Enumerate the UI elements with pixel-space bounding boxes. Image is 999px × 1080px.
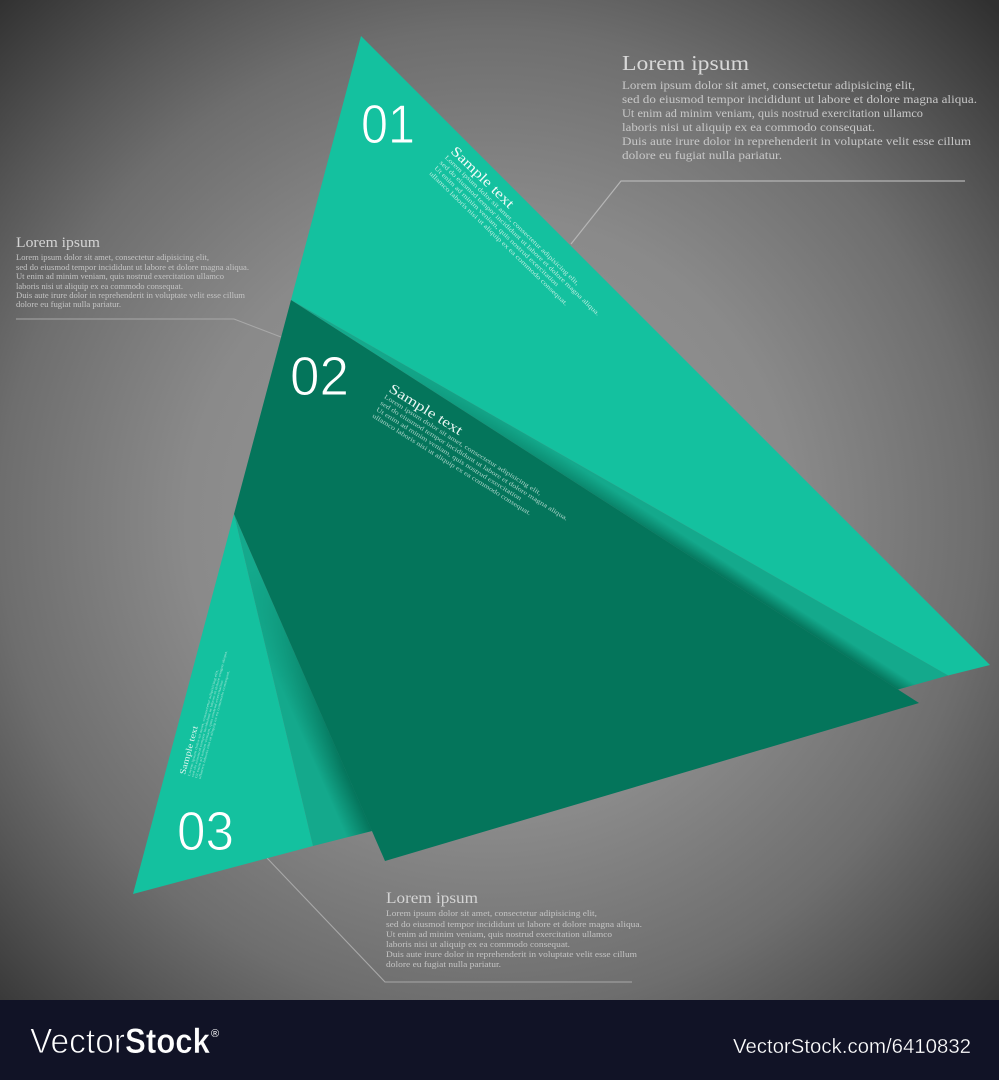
text block: section 02: [16, 235, 249, 309]
fold 03: [234, 514, 372, 846]
sample body 01: Lorem ipsum dolor sit amet, consectetur adipisicing elit,: [443, 154, 581, 287]
body 01: Duis aute irure dolor in reprehenderit in voluptate velit esse cillum: [622, 134, 972, 148]
panel: triangle 02: [234, 300, 919, 861]
footer logo: Stock: [125, 1022, 210, 1061]
footer logo: [30, 1022, 219, 1061]
sample heading 02: Sample text: [386, 382, 465, 439]
body 01: sed do eiusmod tempor incididunt ut labore et dolore magna aliqua.: [622, 92, 977, 106]
sample body 02: sed do eiusmod tempor incididunt ut labore et dolore magna aliqua.: [379, 400, 569, 523]
footer bar: [0, 1000, 999, 1080]
heading 03: Lorem ipsum: [386, 890, 478, 907]
body 02: sed do eiusmod tempor incididunt ut labore et dolore magna aliqua.: [16, 263, 249, 272]
leader line: section 02: [16, 319, 281, 337]
body 03: Ut enim ad minim veniam, quis nostrud exercitation ullamco: [386, 929, 613, 939]
body 03: Duis aute irure dolor in reprehenderit in voluptate velit esse cillum: [386, 949, 637, 959]
body 02: Ut enim ad minim veniam, quis nostrud exercitation ullamco: [16, 272, 224, 281]
panel: triangle 01: [291, 36, 990, 690]
text block: section 01: [622, 51, 977, 162]
sample body 02: ullamco laboris nisi ut aliquip ex ea commodo consequat.: [371, 413, 533, 517]
sample body 03: Ut enim ad minim veniam, quis nostrud exercitation: [194, 679, 225, 779]
sample body 02: Lorem ipsum dolor sit amet, consectetur adipisicing elit,: [383, 394, 543, 497]
sample body 03: ullamco laboris nisi ut aliquip ex ea commodo consequat.: [198, 670, 231, 779]
light face 01: [291, 36, 990, 676]
sample body 03: Lorem ipsum dolor sit amet, consectetur adipisicing elit,: [187, 669, 220, 777]
sample heading 03: Sample text: [177, 724, 200, 776]
body 03: laboris nisi ut aliquip ex ea commodo consequat.: [386, 939, 570, 949]
body 03: dolore eu fugiat nulla pariatur.: [386, 959, 501, 969]
fold shadow 03: [268, 600, 372, 836]
body 03: [386, 908, 642, 969]
footer logo: Vector: [30, 1022, 125, 1061]
sample body 02: [371, 394, 573, 535]
body 02: [16, 253, 249, 309]
body 02: Duis aute irure dolor in reprehenderit in voluptate velit esse cillum: [16, 291, 246, 300]
number 02: 02: [290, 345, 349, 407]
sample text 02: [371, 382, 581, 535]
sample body 03: sed do eiusmod tempor incididunt ut labore et dolore magna aliqua.: [191, 650, 228, 778]
number 03: 03: [177, 800, 234, 862]
body 02: dolore eu fugiat nulla pariatur.: [16, 300, 121, 309]
body 02: Lorem ipsum dolor sit amet, consectetur adipisicing elit,: [16, 253, 209, 262]
sample body 01: Ut enim ad minim veniam, quis nostrud exercitation: [433, 165, 561, 289]
sample body 01: sed do eiusmod tempor incididunt ut labore et dolore magna aliqua.: [438, 160, 601, 318]
footer logo: ®: [211, 1028, 219, 1040]
sample text 03: [177, 646, 235, 779]
heading 01: Lorem ipsum: [622, 51, 749, 75]
body 01: laboris nisi ut aliquip ex ea commodo consequat.: [622, 120, 875, 134]
light face 03: [133, 514, 313, 894]
heading 02: Lorem ipsum: [16, 235, 101, 251]
sample body 02: Ut enim ad minim veniam, quis nostrud exercitation: [375, 406, 523, 503]
body 01: Ut enim ad minim veniam, quis nostrud exercitation ullamco: [622, 106, 923, 120]
number 01: 01: [361, 93, 415, 155]
sample text 01: [427, 144, 616, 329]
leader line: section 03: [267, 858, 632, 982]
body 01: Lorem ipsum dolor sit amet, consectetur adipisicing elit,: [622, 78, 915, 92]
leader line: section 01: [571, 181, 965, 244]
sample body 03: [187, 649, 235, 779]
text block: section 03: [386, 890, 642, 969]
body 02: laboris nisi ut aliquip ex ea commodo consequat.: [16, 282, 183, 291]
body 01: [622, 78, 977, 162]
sample heading 01: Sample text: [447, 144, 517, 212]
panel: triangle 03: [133, 514, 372, 894]
fold shadow 01: [422, 383, 912, 690]
fold 01: [291, 300, 948, 690]
body 01: dolore eu fugiat nulla pariatur.: [622, 148, 782, 162]
sample body 01: [427, 154, 607, 329]
sample body 01: ullamco laboris nisi ut aliquip ex ea commodo consequat.: [427, 170, 569, 308]
body 03: sed do eiusmod tempor incididunt ut labore et dolore magna aliqua.: [386, 919, 642, 929]
body 03: Lorem ipsum dolor sit amet, consectetur adipisicing elit,: [386, 908, 597, 918]
footer id: VectorStock.com/6410832: [733, 1036, 971, 1058]
